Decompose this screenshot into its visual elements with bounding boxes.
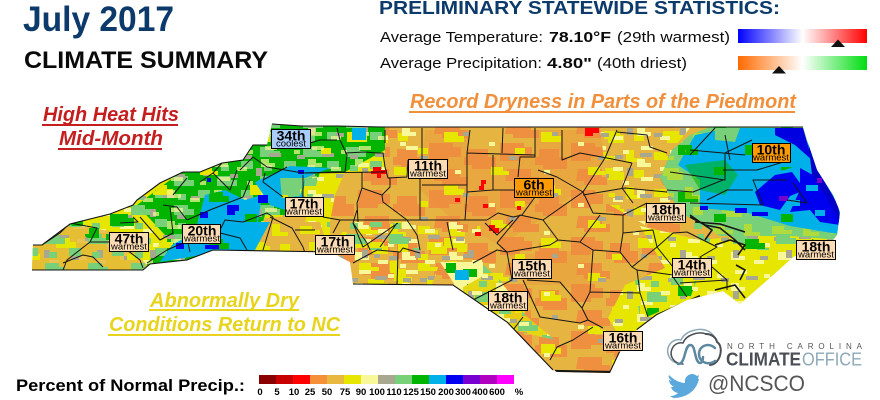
legend values: 5 [274,387,280,398]
logo: NC Climate Office: CLIMATE [726,350,801,370]
rank label: 6th: 6th [524,176,544,192]
logo: NC Climate Office: NORTH CAROLINA [727,342,863,351]
legend values: 50 [322,387,332,398]
south-central yellow and grey [341,224,481,284]
legend values: 150 [420,387,436,398]
temperature statistic [380,29,730,46]
rank label: 17th north: 17th [290,196,318,212]
precipitation statistic: Average Precipitation: [380,55,542,72]
rank label: 18th central: 18th [652,202,680,218]
rank label: 17th south [316,234,354,256]
rank label: 18th central: warmest [647,212,684,224]
logo: NC Climate Office [668,329,863,370]
temperature statistic: 78.10°F [549,29,611,46]
legend values: 75 [340,387,351,398]
rank label: 17th north [285,196,324,218]
rank label: 14th [672,256,712,278]
north-east wet area [660,125,850,240]
precipitation statistic: (40th driest) [597,55,687,72]
central east mixed yellow [600,128,680,224]
twitter handle: @NCSCO [708,371,805,396]
west mountain mix [20,120,385,275]
legend values: 100 [369,387,385,398]
record-dry red spots [371,167,387,178]
precipitation rank bar [738,56,867,74]
rank label: 47th [110,230,148,252]
rank label: 47th: 47th [115,230,143,246]
callout: abnormally dry [108,290,341,336]
rank label: 15th: warmest [513,268,550,280]
logo: NC Climate Office: OFFICE [802,350,862,370]
west blue spots [176,170,304,249]
callout: high heat: Mid-Month [59,128,163,150]
rank label: 34th coolest: coolest [276,138,306,150]
rank label: 20th: 20th [188,222,216,238]
far-west county mix [32,226,148,270]
coastal yellow band [608,226,836,331]
precipitation statistic: 4.80" [547,55,592,72]
rank label: 16th: warmest [604,340,641,352]
legend title: Percent of Normal Precip.: [16,376,245,395]
rank label: 17th south: 17th [321,234,349,250]
rank label: 18th east: 18th [802,238,830,254]
rank label: 11th: warmest [409,168,446,180]
rank label: 18th south: 18th [494,290,522,306]
rank label: 18th east: warmest [797,250,834,260]
south-border green mix [453,262,555,340]
rank label: 11th [408,158,448,180]
rank label: 17th south: warmest [316,244,353,256]
legend values [257,387,524,398]
rank label: 47th: warmest [110,242,147,252]
rank label: 11th: 11th [414,158,442,174]
icon: twitter bird [669,374,699,398]
rank label: 18th east [796,238,836,260]
legend values: 110 [386,387,402,398]
rank label: 10th: 10th [757,142,785,158]
state outline [32,124,803,370]
yellow north edge [386,133,408,143]
legend values: 0 [257,387,263,398]
rank label: 18th south: warmest [489,300,526,312]
legend values: 125 [403,387,420,398]
legend values: 600 [489,387,505,398]
legend colour scale [259,375,514,384]
callout: abnormally dry: Abnormally Dry [149,290,300,312]
county lines [42,128,807,373]
legend values: 90 [356,387,366,398]
legend values: % [515,387,524,398]
rank label: 17th north: warmest [285,206,322,218]
legend values: 10 [289,387,299,398]
rank label: 34th coolest [272,128,310,150]
rank label: 16th: 16th [609,330,637,346]
temperature statistic: (29th warmest) [617,29,730,46]
rank label: 10th: warmest [752,152,789,164]
precipitation statistic [380,55,687,72]
temperature rank bar [738,29,867,47]
subtitle: CLIMATE SUMMARY [24,47,268,74]
callout: record dryness: Record Dryness in Parts of the Piedmont [410,91,797,113]
legend values: 300 [455,387,471,398]
rank label: 18th south [488,290,528,312]
legend values: 400 [472,387,488,398]
rank label: 14th: 14th [678,256,706,272]
temperature statistic: Average Temperature: [380,29,543,46]
rank label: 20th: warmest [183,234,220,244]
icon: cloud [668,329,721,365]
legend values: 25 [305,387,316,398]
rank label: 34th coolest: 34th [277,128,305,144]
rank label: 15th [512,258,552,280]
foothill gold block [252,216,324,252]
rank label: 10th [752,142,790,164]
title: July 2017 [23,0,174,39]
rank label: 6th [514,176,554,198]
callout: abnormally dry: Conditions Return to NC [109,314,341,336]
callout: high heat: High Heat Hits [43,104,179,126]
legend values: 200 [438,387,454,398]
rank label: 16th [604,330,642,352]
rank label: 14th: warmest [673,268,710,278]
rank label: 15th: 15th [518,258,546,274]
callout: high heat [42,104,179,150]
rank label: 18th central [646,202,686,224]
rank label: 6th: warmest [515,188,552,198]
western cyan core [160,190,270,262]
map: North Carolina precipitation [32,124,840,373]
rank label: 20th [182,222,220,244]
